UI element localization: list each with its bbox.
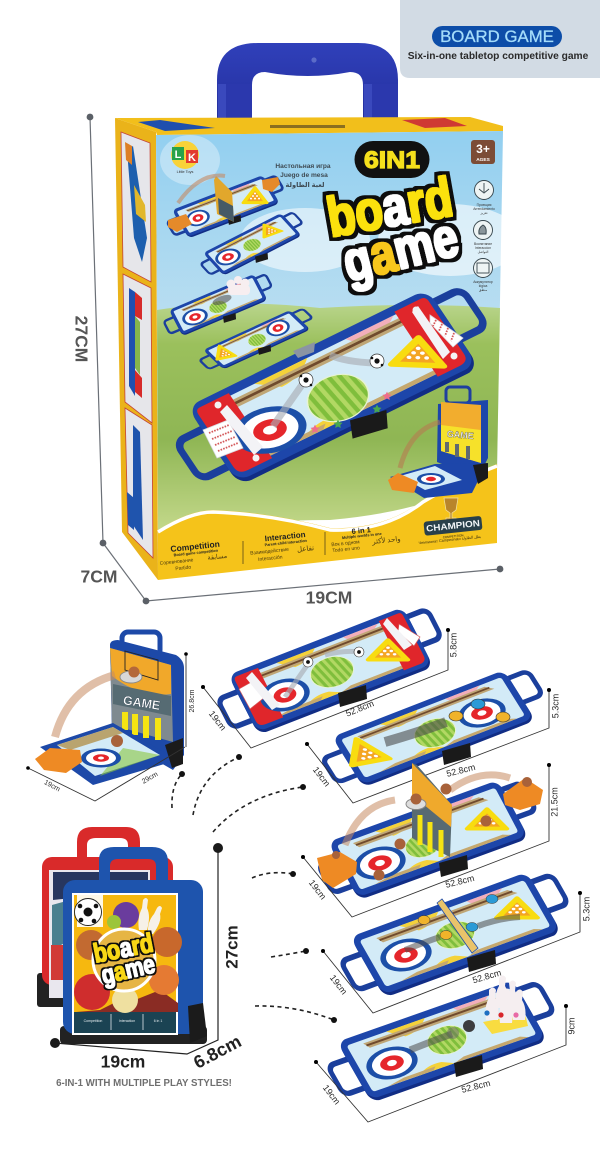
benefit: competition: Соревнование: [159, 557, 194, 567]
caption: 6-IN-1 WITH MULTIPLE PLAY STYLES!: [56, 1078, 232, 1089]
benefit: competition: [158, 538, 228, 574]
dividers: [243, 532, 325, 564]
header panel: [400, 0, 600, 78]
benefit: 6 in 1: [330, 522, 401, 554]
small board with curling: [193, 306, 320, 374]
champion logo: [423, 516, 483, 541]
logo LK: [171, 141, 199, 174]
case logo: game: [98, 949, 158, 990]
benefit: interaction: Взаимодействие: [250, 546, 289, 557]
champion logo: CHAMPION: [426, 518, 480, 534]
case dimensions: [50, 843, 245, 1073]
board game logo: game: [336, 204, 464, 294]
pucks: [449, 699, 510, 722]
small board with hoop: [162, 171, 290, 242]
board 1 dimensions: [201, 628, 458, 748]
length label: 52.8cm: [471, 968, 502, 985]
benefit: interaction: Interaction: [264, 530, 306, 543]
mini upright board on box: GAME: [446, 429, 474, 441]
length label: 52.8cm: [444, 873, 475, 890]
box top face: [115, 117, 503, 135]
case logo: board: [91, 928, 156, 969]
trophy: [444, 498, 458, 521]
depth label: 19cm: [311, 765, 332, 788]
soccer ball one: [303, 657, 313, 667]
board game logo: board: [322, 165, 457, 249]
soccer ball two: [370, 354, 384, 368]
feature icons: [473, 180, 495, 292]
stand-up basketball mode: [35, 632, 184, 785]
goal near: [239, 680, 265, 709]
bowling pins: [485, 976, 526, 1023]
benefit: interaction: [248, 529, 315, 564]
multilingual title: [275, 163, 331, 189]
height label: 9cm: [566, 1017, 576, 1035]
feature icons: Arrendamiento: [473, 207, 495, 211]
trophy caption: Чемпионат Campeonato بطل الطاولة: [418, 535, 481, 545]
label width: 29cm: [141, 771, 159, 786]
small board with bowling: [160, 270, 277, 340]
case artwork: [72, 893, 182, 1035]
case logo: [91, 928, 158, 990]
label 27CM: 27CM: [71, 316, 91, 362]
soccer ball two: [354, 647, 364, 657]
depth label: 6.8cm: [190, 1031, 245, 1073]
label 19CM: 19CM: [306, 588, 352, 608]
centre net: [437, 899, 478, 953]
benefit: 6 in 1: 6 in 1: [351, 525, 371, 536]
feature icons: Interaccion: [475, 246, 491, 250]
board 3 basketball mode: [309, 763, 548, 907]
label height: 26.8cm: [189, 689, 196, 712]
benefit: 6 in 1: Multiple worlds in one: [342, 532, 382, 540]
board 2 pucks mode: [313, 663, 554, 795]
ball trails: [273, 355, 375, 426]
multilingual title: Juego de mesa: [280, 172, 328, 179]
depth label: 19cm: [328, 973, 349, 996]
6in1 badge: [354, 141, 430, 178]
logo LK: K: [188, 152, 196, 164]
goal far: [398, 624, 420, 646]
feature icons: lógica: [479, 284, 487, 288]
case artwork: Competition: [84, 1019, 102, 1023]
board 3 dimensions: [301, 763, 559, 917]
product box: [115, 117, 522, 580]
height label: 5.8cm: [448, 633, 458, 657]
height label: 5.3cm: [581, 897, 591, 921]
benefit: interaction: Parent-child interaction: [264, 539, 308, 547]
goal far: [412, 306, 463, 360]
benefit: competition: Board game competition: [173, 549, 219, 557]
width label: 19cm: [101, 1052, 145, 1072]
benefit: interaction: Interacción: [258, 554, 283, 563]
height label: 5.3cm: [550, 694, 560, 718]
board 5 dimensions: [314, 1004, 576, 1122]
benefit: competition: Partido: [175, 565, 192, 572]
benefit: 6 in 1: Bок в одном: [331, 539, 360, 548]
label 7CM: 7CM: [81, 567, 117, 587]
board 2 dimensions: [305, 688, 560, 803]
depth label: 19cm: [207, 709, 228, 732]
depth label: 19cm: [321, 1083, 342, 1106]
feature icons: Воспитание: [474, 242, 492, 246]
age badge: AGES: [476, 157, 491, 163]
small board with net: [194, 209, 310, 280]
goal near: [203, 402, 263, 462]
main game board on box: [161, 276, 506, 499]
length label: 52.8cm: [445, 762, 476, 779]
length label: 52.8cm: [460, 1078, 491, 1095]
box front face: [156, 131, 522, 580]
case artwork: Interaction: [119, 1019, 135, 1023]
handle of the box: [217, 43, 398, 125]
multilingual title: لعبة الطاولة: [286, 182, 324, 189]
feature icons: Аккумулятор: [473, 280, 493, 284]
benefit: competition: مسابقة: [207, 553, 228, 562]
benefit: 6 in 1: Todo en uno: [332, 545, 360, 554]
dashed connector curves: [172, 754, 337, 1023]
ball trails: [345, 775, 510, 845]
benefit: competition: Competition: [170, 539, 220, 554]
label depth: 19cm: [43, 779, 61, 793]
blue carrying case: [60, 847, 207, 1044]
box dimension lines: [71, 114, 503, 608]
bowling ball: [447, 1020, 475, 1039]
launcher left: [317, 852, 357, 888]
box side face: [115, 118, 158, 580]
case artwork: 6 in 1: [154, 1019, 162, 1023]
multilingual title: Настольная игра: [275, 163, 331, 170]
red carrying case: [37, 827, 173, 1007]
soccer ball one: [299, 373, 313, 387]
length label: 52.8cm: [344, 698, 375, 719]
board game logo: [322, 165, 464, 294]
logo LK: Little Toys: [177, 170, 194, 174]
mini upright board on box: [388, 387, 488, 498]
feature icons: Проекция: [477, 203, 492, 207]
subtitle: Six-in-one tabletop competitive game: [408, 51, 589, 62]
pucks: [418, 894, 498, 940]
depth label: 19cm: [307, 878, 328, 901]
logo LK: L: [175, 149, 182, 161]
height label: 21.5cm: [549, 787, 559, 817]
title pill: BOARD GAME: [440, 27, 554, 46]
bowling base: [483, 1014, 528, 1034]
board latch top: [293, 342, 315, 358]
balls: [332, 777, 532, 880]
stand dimensions: [26, 652, 196, 801]
champion logo: COMPETITION: [443, 533, 464, 539]
board 1 red goals: [209, 600, 453, 742]
6in1 badge: 6IN1: [364, 147, 420, 174]
launcher right: [503, 778, 543, 810]
height label: 27cm: [222, 925, 241, 969]
board 4 dimensions: [321, 891, 591, 1013]
benefit: 6 in 1: واحد لأكثر: [371, 534, 401, 546]
stand-up basketball mode: GAME: [122, 693, 161, 713]
board 5 bowling mode: [318, 973, 567, 1110]
feature icons: التواصل: [478, 250, 488, 254]
ball trails: [285, 651, 358, 697]
age badge: 3+: [476, 142, 490, 156]
hoop panel: [406, 763, 452, 857]
age badge: [471, 140, 495, 164]
feature icons: تعزيز: [479, 211, 488, 215]
board 4 centre net mode: [331, 865, 581, 1005]
benefit: interaction: تفاعل: [297, 545, 314, 554]
feature icons: منطق: [479, 288, 487, 292]
